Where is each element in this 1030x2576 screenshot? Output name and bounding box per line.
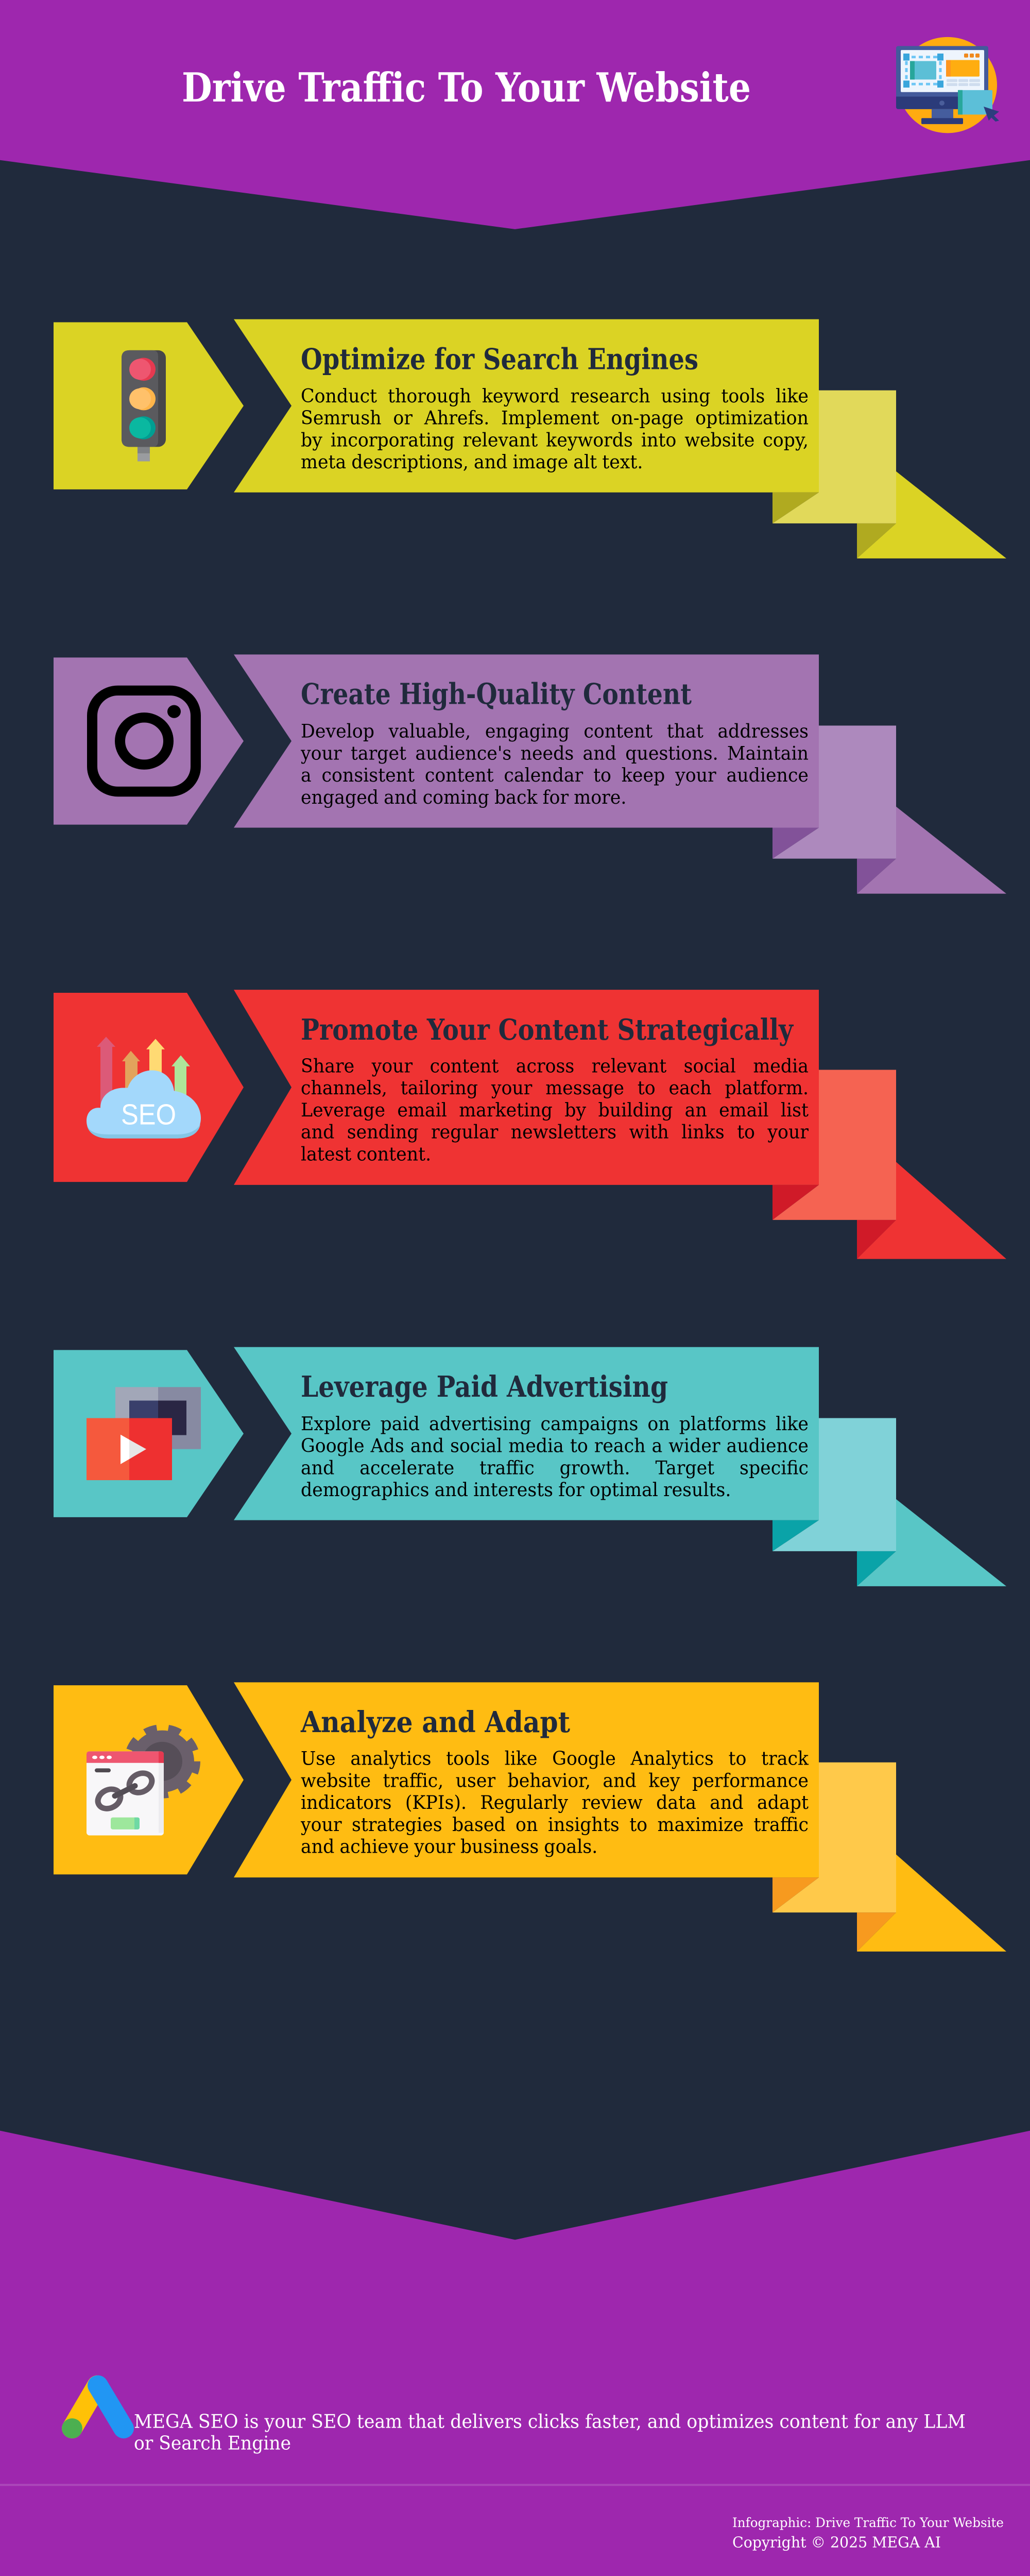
body text: channels, tailoring your message to each platform. <box>301 1077 809 1099</box>
body text: meta descriptions, and image alt text. <box>301 451 643 473</box>
text banner <box>234 1347 819 1520</box>
tail fold <box>772 725 1006 894</box>
panel: step 4 leverage paid advertising <box>54 1347 1006 1586</box>
panel: step 2 create high-quality content <box>54 654 1006 894</box>
icon: video player <box>87 1387 201 1480</box>
tail fold <box>772 1070 1006 1259</box>
body text: Leverage email marketing by building an email list <box>301 1099 809 1121</box>
body text: your strategies based on insights to maximize traffic <box>301 1814 809 1836</box>
body text: Use analytics tools like Google Analytics to track <box>301 1748 809 1769</box>
icon chevron <box>54 1685 244 1874</box>
icon: traffic light <box>122 350 166 461</box>
tagline: MEGA SEO is your SEO team that delivers clicks faster, and optimizes content for any LLM <box>134 2410 966 2432</box>
icon chevron <box>54 322 244 489</box>
heading: Create High-Quality Content <box>301 677 692 711</box>
body text: Explore paid advertising campaigns on platforms like <box>301 1413 809 1435</box>
body text: Semrush or Ahrefs. Implement on-page optimization <box>301 407 809 429</box>
body text <box>301 1055 816 1170</box>
body text: by incorporating relevant keywords into website copy, <box>301 429 809 451</box>
tail fold <box>772 1418 1006 1586</box>
panel: step 5 analyze and adapt <box>54 1682 1006 1952</box>
panel: step 3 promote your content strategically <box>54 990 1006 1259</box>
heading: Leverage Paid Advertising <box>301 1370 668 1404</box>
text banner <box>234 990 819 1185</box>
icon: mega logo <box>62 2385 124 2438</box>
icon chevron <box>54 657 244 825</box>
body text: and achieve your business goals. <box>301 1836 597 1857</box>
heading: Promote Your Content Strategically <box>301 1013 794 1047</box>
icon: seo cloud with arrows: SEO <box>121 1098 176 1131</box>
icon: seo cloud with arrows <box>87 1037 201 1139</box>
title: Drive Traffic To Your Website <box>182 64 751 111</box>
body text: Develop valuable, engaging content that addresses <box>301 720 809 742</box>
icon: website monitor <box>896 37 999 133</box>
text banner <box>234 319 819 493</box>
footer band <box>0 2131 1030 2576</box>
heading: Analyze and Adapt <box>300 1705 571 1739</box>
body text: a consistent content calendar to keep your audience <box>301 764 809 786</box>
icon chevron <box>54 1350 244 1517</box>
body text <box>301 720 816 815</box>
body text <box>301 1413 816 1507</box>
text banner <box>234 654 819 827</box>
tail fold <box>772 391 1006 558</box>
body text: latest content. <box>301 1143 431 1165</box>
header band <box>0 0 1030 229</box>
body text: indicators (KPIs). Regularly review data and adapt <box>301 1791 809 1814</box>
footer credits <box>732 2515 1004 2551</box>
panel: step 1 optimize for search engines <box>54 319 1006 558</box>
heading: Optimize for Search Engines <box>301 342 698 376</box>
footer credits: Infographic: Drive Traffic To Your Website <box>732 2515 1004 2531</box>
body text: and accelerate traffic growth. Target specific <box>301 1456 809 1479</box>
body text: demographics and interests for optimal results. <box>301 1479 731 1501</box>
body text: website traffic, user behavior, and key performance <box>301 1769 809 1791</box>
icon chevron <box>54 993 244 1182</box>
body text: your target audience's needs and questions. Maintain <box>301 742 809 764</box>
icon: analytics window with gear and chain <box>87 1728 196 1836</box>
body text: Conduct thorough keyword research using tools like <box>301 385 809 407</box>
tail fold <box>772 1762 1006 1952</box>
body text <box>301 1748 816 1862</box>
body text: Google Ads and social media to reach a wider audience <box>301 1435 809 1456</box>
icon: instagram <box>92 690 196 792</box>
text banner <box>234 1682 819 1877</box>
body text: engaged and coming back for more. <box>301 786 626 808</box>
tagline <box>134 2410 966 2454</box>
body text <box>301 385 816 480</box>
footer credits: Copyright © 2025 MEGA AI <box>732 2534 941 2551</box>
body text: and sending regular newsletters with links to your <box>301 1121 809 1143</box>
tagline: or Search Engine <box>134 2432 291 2454</box>
body text: Share your content across relevant social media <box>301 1055 809 1077</box>
